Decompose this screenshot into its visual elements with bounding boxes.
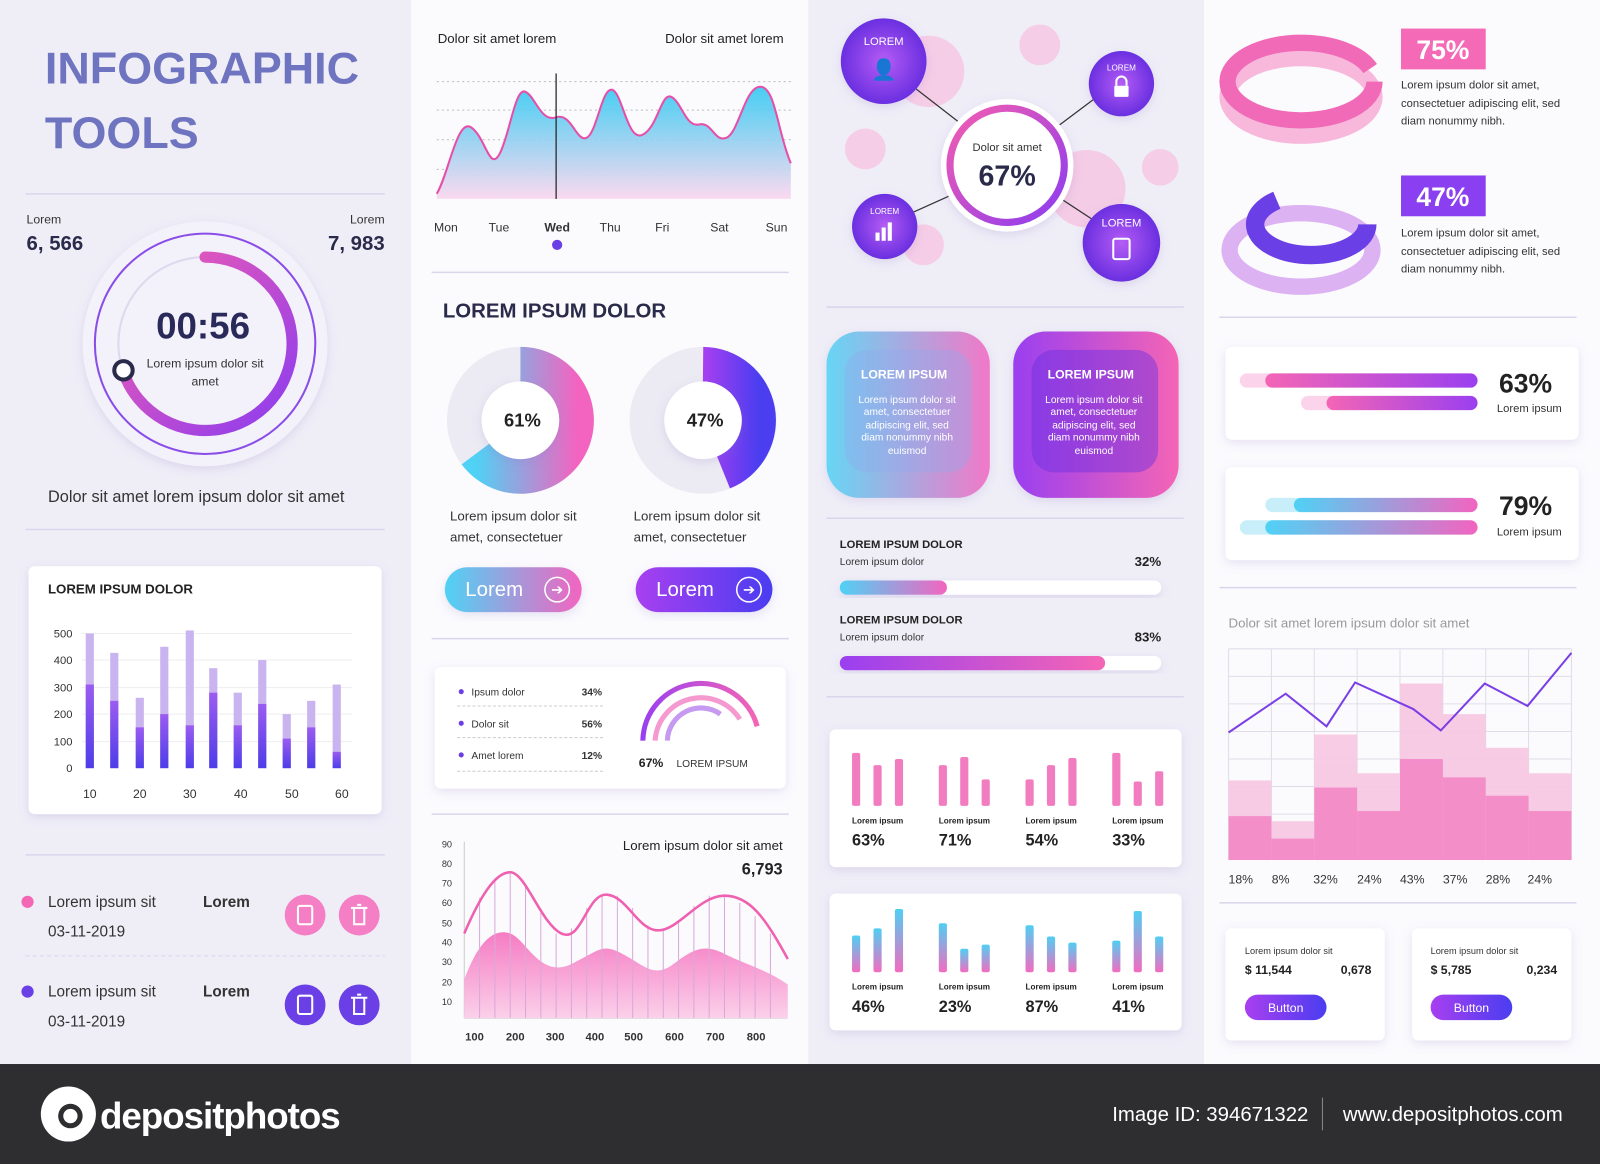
- wave chart: 800: [747, 1032, 765, 1044]
- squircle card 1: adipiscing elit, sed: [866, 420, 949, 431]
- wave chart: 100: [465, 1032, 484, 1044]
- squircle card 2: [1013, 332, 1179, 498]
- caption: Dolor sit amet lorem ipsum dolor sit amet: [48, 488, 345, 506]
- panel: pink mini bars: Lorem ipsum: [852, 816, 903, 825]
- button 1: [445, 567, 582, 612]
- wave chart: 6,793: [742, 860, 783, 878]
- squircle card 1: euismod: [888, 446, 927, 457]
- card: price 1: Lorem ipsum dolor sit: [1245, 946, 1333, 956]
- wave chart: 400: [586, 1032, 604, 1044]
- card: price 2: Lorem ipsum dolor sit: [1431, 946, 1519, 956]
- wave chart: 500: [624, 1032, 643, 1044]
- bubble network: LOREM: [870, 207, 899, 216]
- squircle card 1: diam nonummy nibh: [861, 433, 953, 444]
- stats left: [27, 212, 83, 255]
- card: price 1: [1226, 928, 1385, 1041]
- wave chart: 60: [442, 898, 452, 908]
- title: INFOGRAPHIC: [45, 43, 359, 94]
- panel: bar chart card: 400: [54, 655, 72, 667]
- panel: pink mini bars: Lorem ipsum: [1112, 816, 1163, 825]
- 75% text: [1401, 29, 1560, 127]
- combo chart: [1229, 615, 1571, 886]
- wave chart: 200: [506, 1032, 525, 1044]
- donut 47%: Lorem ipsum dolor sit: [634, 508, 761, 523]
- panel: cyan mini bars: [830, 894, 1182, 1030]
- area chart weekly: Mon: [434, 221, 458, 235]
- progress 83%: LOREM IPSUM DOLOR: [840, 614, 963, 626]
- stats left: 6, 566: [27, 233, 83, 255]
- progress 32%: [840, 539, 1161, 595]
- bubble network: 👤: [871, 58, 896, 82]
- progress 32%: LOREM IPSUM DOLOR: [840, 539, 963, 551]
- wave chart: [442, 838, 788, 1044]
- panel: bar chart card: 10: [83, 787, 97, 801]
- timer gauge: Lorem ipsum dolor sit: [147, 356, 264, 370]
- panel: bar chart card: 200: [54, 709, 72, 721]
- combo chart: 37%: [1443, 872, 1467, 886]
- panel: 63% bars: [1226, 347, 1579, 440]
- panel: list and arcs: 56%: [582, 719, 602, 730]
- bubble network: LOREM: [1107, 63, 1136, 72]
- panel: bar chart card: LOREM IPSUM DOLOR: [48, 582, 193, 597]
- 47% text: 47%: [1416, 182, 1469, 212]
- wave chart: 10: [442, 997, 452, 1007]
- button 2: Lorem: [656, 579, 714, 601]
- progress 83%: Lorem ipsum dolor: [840, 633, 925, 644]
- panel: bar chart card: 50: [285, 787, 299, 801]
- combo chart: Dolor sit amet lorem ipsum dolor sit amet: [1229, 615, 1470, 630]
- panel: pink mini bars: Lorem ipsum: [939, 816, 990, 825]
- panel: list and arcs: [435, 667, 786, 789]
- wave chart: 700: [706, 1032, 725, 1044]
- wave chart: Lorem ipsum dolor sit amet: [623, 838, 783, 853]
- progress 83%: [840, 614, 1161, 670]
- list row 1: [21, 894, 380, 941]
- bubble network: Dolor sit amet: [973, 142, 1043, 154]
- area chart weekly: [434, 31, 791, 250]
- title: TOOLS: [45, 107, 199, 158]
- progress 83%: 83%: [1135, 630, 1161, 645]
- wave chart: 300: [546, 1032, 564, 1044]
- wave chart: 30: [442, 957, 452, 967]
- panel: bar chart card: [29, 566, 382, 814]
- 47% text: Lorem ipsum dolor sit amet,: [1401, 228, 1539, 240]
- panel: cyan mini bars: 41%: [1112, 998, 1145, 1016]
- button 2: [636, 567, 772, 612]
- list row 1: Lorem ipsum sit: [48, 894, 157, 911]
- list row 1: 03-11-2019: [48, 924, 125, 941]
- donut 61%: [450, 364, 577, 545]
- combo chart: 18%: [1229, 872, 1253, 886]
- area chart weekly: Tue: [489, 221, 509, 235]
- stats right: Lorem: [350, 212, 385, 226]
- area chart weekly: Sun: [766, 221, 788, 235]
- wave chart: 90: [442, 840, 452, 850]
- panel: bar chart card: 500: [54, 629, 72, 641]
- wave chart: 70: [442, 879, 452, 889]
- wave chart: 600: [665, 1032, 684, 1044]
- combo chart: 32%: [1313, 872, 1338, 886]
- panel: bar chart card: 100: [54, 737, 72, 749]
- donut 47%: 47%: [687, 409, 723, 430]
- area chart weekly: Dolor sit amet lorem: [438, 31, 556, 46]
- squircle card 2: euismod: [1075, 446, 1113, 457]
- card: price 2: $ 5,785: [1431, 963, 1472, 977]
- stats left: Lorem: [27, 212, 61, 226]
- bubble network: [841, 18, 1179, 282]
- panel: pink mini bars: Lorem ipsum: [1026, 816, 1077, 825]
- title: [45, 43, 359, 158]
- footer: www.depositphotos.com: [1342, 1104, 1563, 1126]
- panel: bar chart card: 300: [54, 683, 72, 695]
- panel: 63% bars: Lorem ipsum: [1497, 403, 1562, 415]
- squircle card 1: [827, 332, 990, 498]
- panel: cyan mini bars: Lorem ipsum: [939, 983, 990, 992]
- donut 47%: amet, consectetuer: [634, 530, 747, 545]
- card: price 2: [1412, 928, 1571, 1041]
- panel: list and arcs: Dolor sit: [471, 719, 509, 730]
- progress 32%: Lorem ipsum dolor: [840, 557, 925, 568]
- panel: pink mini bars: 63%: [852, 832, 885, 850]
- panel: bar chart card: 20: [133, 787, 147, 801]
- list row 2: 03-11-2019: [48, 1013, 125, 1030]
- card: price 1: Button: [1268, 1001, 1304, 1015]
- donut 47%: [634, 364, 761, 545]
- squircle card 1: Lorem ipsum dolor sit: [858, 395, 956, 406]
- bubble network: LOREM: [864, 36, 904, 48]
- footer: [0, 1064, 1600, 1164]
- wave chart: 80: [442, 859, 452, 869]
- donut 61%: Lorem ipsum dolor sit: [450, 508, 577, 523]
- footer: Image ID: 394671322: [1112, 1104, 1308, 1126]
- panel: bar chart card: 60: [335, 787, 349, 801]
- 47% text: diam nonummy nibh.: [1401, 263, 1505, 275]
- donut 61%: 61%: [504, 409, 541, 430]
- card: price 2: 0,234: [1527, 963, 1557, 977]
- panel: pink mini bars: 54%: [1026, 832, 1059, 850]
- card: price 2: Button: [1454, 1001, 1489, 1015]
- 47% text: consectetuer adipiscing elit, sed: [1401, 246, 1560, 258]
- card: price 1: $ 11,544: [1245, 963, 1292, 977]
- squircle card 1: amet, consectetuer: [864, 407, 951, 418]
- squircle card 2: LOREM IPSUM: [1048, 367, 1134, 381]
- squircle card 2: diam nonummy nibh: [1048, 433, 1140, 444]
- 47% text: [1401, 175, 1560, 275]
- 75% text: Lorem ipsum dolor sit amet,: [1401, 80, 1539, 92]
- panel: cyan mini bars: Lorem ipsum: [1112, 983, 1163, 992]
- donut 61%: amet, consectetuer: [450, 530, 563, 545]
- 75% text: consectetuer adipiscing elit, sed: [1401, 98, 1560, 110]
- timer gauge: 00:56: [156, 306, 250, 347]
- wave chart: 40: [442, 938, 452, 948]
- panel: pink mini bars: [830, 729, 1182, 867]
- panel: list and arcs: LOREM IPSUM: [677, 759, 748, 770]
- panel: bar chart card: 40: [234, 787, 248, 801]
- panel: list and arcs: 12%: [582, 751, 602, 762]
- area chart weekly: Wed: [544, 221, 570, 235]
- squircle card 2: amet, consectetuer: [1051, 407, 1138, 418]
- list row 1: Lorem: [203, 894, 250, 911]
- card: price 1: 0,678: [1341, 963, 1372, 977]
- area chart weekly: Fri: [655, 221, 669, 235]
- combo chart: 8%: [1272, 872, 1290, 886]
- panel: cyan mini bars: Lorem ipsum: [1026, 983, 1077, 992]
- combo chart: 24%: [1528, 872, 1552, 886]
- area chart weekly: Dolor sit amet lorem: [665, 31, 784, 46]
- bubble network: LOREM: [1101, 217, 1141, 229]
- list row 2: Lorem: [203, 984, 250, 1001]
- panel: cyan mini bars: Lorem ipsum: [852, 983, 903, 992]
- stats right: 7, 983: [328, 233, 385, 255]
- panel: list and arcs: 67%: [639, 756, 663, 770]
- panel: bar chart card: 30: [183, 787, 197, 801]
- panel: list and arcs: Amet lorem: [471, 751, 524, 762]
- button 1: Lorem: [465, 579, 523, 601]
- wave chart: 20: [442, 977, 452, 987]
- squircle card 2: Lorem ipsum dolor sit: [1045, 395, 1143, 406]
- squircle card 2: adipiscing elit, sed: [1052, 420, 1136, 431]
- panel: cyan mini bars: 87%: [1026, 998, 1059, 1016]
- panel: 63% bars: 63%: [1499, 369, 1552, 399]
- panel: list and arcs: 34%: [582, 688, 602, 699]
- 75% text: 75%: [1416, 35, 1469, 65]
- panel: cyan mini bars: 23%: [939, 998, 972, 1016]
- panel: bar chart card: 0: [66, 763, 72, 775]
- footer: depositphotos: [100, 1095, 340, 1136]
- combo chart: 43%: [1400, 872, 1425, 886]
- 3d ring 75%: [1228, 43, 1374, 136]
- progress 32%: 32%: [1135, 554, 1161, 569]
- panel: cyan mini bars: 46%: [852, 998, 885, 1016]
- heading: LOREM IPSUM DOLOR: [443, 300, 666, 322]
- button 2: ➔: [743, 583, 755, 599]
- 3d ring 47%: [1230, 194, 1372, 287]
- combo chart: 24%: [1357, 872, 1382, 886]
- 75% text: diam nonummy nibh.: [1401, 115, 1505, 127]
- wave chart: 50: [442, 918, 452, 928]
- panel: list and arcs: Ipsum dolor: [471, 688, 525, 699]
- list row 2: [21, 984, 380, 1030]
- panel: pink mini bars: 33%: [1112, 832, 1145, 850]
- area chart weekly: Thu: [600, 221, 621, 235]
- area chart weekly: Sat: [710, 221, 729, 235]
- timer gauge: amet: [191, 375, 219, 389]
- bubble network: 67%: [979, 161, 1036, 193]
- button 1: ➔: [551, 583, 563, 599]
- list row 2: Lorem ipsum sit: [48, 984, 157, 1001]
- timer gauge: [83, 221, 328, 466]
- panel: 79% bars: [1226, 467, 1579, 560]
- panel: 79% bars: 79%: [1499, 491, 1552, 521]
- panel: 79% bars: Lorem ipsum: [1497, 527, 1562, 539]
- squircle card 1: LOREM IPSUM: [861, 367, 947, 381]
- combo chart: 28%: [1486, 872, 1510, 886]
- stats right: [328, 212, 385, 255]
- panel: pink mini bars: 71%: [939, 832, 972, 850]
